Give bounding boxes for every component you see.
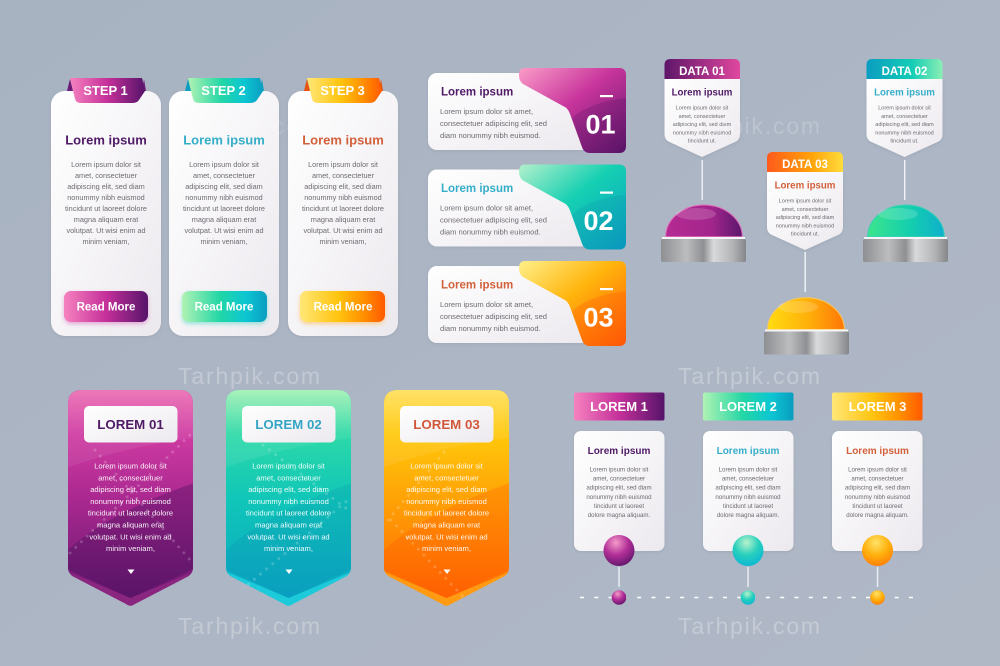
card: step 2: volutpat. Ut wisi enim ad bbox=[184, 226, 264, 235]
shield 03: minim veniam, bbox=[422, 544, 471, 553]
shield 02: magna aliquam erat bbox=[255, 520, 323, 530]
card: 01: Lorem ipsum bbox=[441, 86, 513, 98]
shield 01: amet, consectetuer bbox=[98, 473, 163, 482]
watermarks: Tarhpik.com bbox=[678, 363, 822, 389]
card: 01: consectetuer adipiscing elit, sed bbox=[440, 119, 547, 128]
timeline item 1: Lorem ipsum bbox=[588, 446, 650, 457]
card: 03 bbox=[428, 261, 626, 346]
card: 01: 01 bbox=[585, 110, 616, 140]
card: step 1: Lorem ipsum bbox=[65, 132, 147, 148]
data 01 bbox=[661, 59, 746, 262]
card: step 1: STEP 1 bbox=[83, 83, 128, 98]
timeline item 2: adipiscing elit, sed diam bbox=[715, 485, 781, 492]
data 03: Lorem ipsum bbox=[775, 180, 836, 192]
card: step 1: magna aliquam erat bbox=[74, 215, 138, 224]
shield 03: magna aliquam erat bbox=[413, 520, 481, 530]
data 02: Lorem ipsum dolor sit bbox=[878, 105, 931, 111]
data 03: adipiscing elit, sed diam bbox=[776, 215, 835, 221]
watermarks: Tarhpik.com bbox=[178, 113, 322, 139]
card: step 2: minim veniam, bbox=[200, 237, 248, 246]
card: step 1: Read More bbox=[77, 302, 135, 314]
timeline item 2: dolore magna aliquam. bbox=[717, 512, 780, 519]
card: step 1: adipiscing elit, sed diam bbox=[67, 182, 145, 191]
card: step 3: minim veniam, bbox=[319, 237, 367, 246]
card: step 3: magna aliquam erat bbox=[311, 215, 375, 224]
timeline item 2: amet, consectetuer bbox=[722, 476, 774, 482]
card: step 1: nonummy nibh euismod bbox=[67, 193, 145, 202]
shield 03 bbox=[384, 390, 509, 606]
card: 02: Lorem ipsum bbox=[441, 183, 513, 195]
data 03: DATA 03 bbox=[782, 159, 828, 171]
shield 02: volutpat. Ut wisi enim ad bbox=[247, 532, 330, 541]
data 01: tincidunt ut. bbox=[688, 138, 717, 144]
card: 02: diam nonummy nibh euismod. bbox=[440, 228, 541, 236]
shield 02: minim veniam, bbox=[264, 544, 313, 553]
watermarks: Tarhpik.com bbox=[678, 113, 822, 139]
timeline item 3: LOREM 3 bbox=[849, 399, 906, 414]
shield 03: amet, consectetuer bbox=[414, 473, 479, 482]
panel: shields bbox=[60, 380, 516, 610]
card: step 1: tincidunt ut laoreet dolore bbox=[65, 204, 147, 213]
card: step 2: Lorem ipsum bbox=[183, 132, 265, 148]
shield 01: Lorem ipsum dolor sit bbox=[94, 462, 168, 470]
card: 02: consectetuer adipiscing elit, sed bbox=[440, 216, 547, 224]
data 02 bbox=[863, 59, 948, 262]
shield 02: adipiscing elit, sed diam bbox=[248, 485, 329, 494]
card: step 2: magna aliquam erat bbox=[192, 215, 256, 224]
shield 02: Lorem ipsum dolor sit bbox=[252, 462, 326, 470]
timeline item 1: LOREM 1 bbox=[590, 399, 648, 414]
dashed line bbox=[580, 596, 915, 598]
card: step 2: adipiscing elit, sed diam bbox=[185, 182, 263, 191]
card: 03: Lorem ipsum bbox=[441, 280, 513, 292]
timeline item 3: amet, consectetuer bbox=[851, 476, 904, 482]
timeline item 3: adipiscing elit, sed diam bbox=[845, 485, 910, 492]
panel: step cards bbox=[51, 78, 398, 336]
data 01: DATA 01 bbox=[679, 66, 725, 78]
panel: numbered cards bbox=[428, 68, 626, 346]
timeline item 2: LOREM 2 bbox=[719, 399, 777, 414]
data 03: Lorem ipsum dolor sit bbox=[779, 198, 832, 204]
card: step 2: amet, consectetuer bbox=[193, 171, 256, 180]
card: step 1: amet, consectetuer bbox=[75, 171, 138, 180]
watermarks: Tarhpik.com bbox=[678, 613, 822, 639]
shield 03: nonummy nibh euismod bbox=[406, 497, 487, 506]
data 01: amet, consectetuer bbox=[679, 114, 726, 120]
card: step 2: Read More bbox=[195, 302, 253, 314]
shield 03: Lorem ipsum dolor sit bbox=[410, 462, 484, 470]
card: step 3: nonummy nibh euismod bbox=[304, 193, 382, 202]
card: 01 bbox=[428, 68, 626, 153]
timeline item 3 bbox=[832, 392, 922, 605]
timeline item 2: nonummy nibh euismod bbox=[715, 494, 781, 501]
card: step 3: Lorem ipsum dolor sit bbox=[308, 160, 378, 169]
card: 02: Lorem ipsum dolor sit amet, bbox=[440, 204, 533, 212]
card: 02 bbox=[428, 164, 626, 250]
timeline item 3: nonummy nibh euismod bbox=[845, 494, 911, 501]
shield 01: magna aliquam erat bbox=[97, 520, 165, 530]
timeline item 2 bbox=[703, 392, 794, 605]
data 03: amet, consectetuer bbox=[782, 207, 829, 213]
card: step 2: tincidunt ut laoreet dolore bbox=[183, 204, 265, 213]
panel: data domes bbox=[661, 59, 948, 354]
card: 03: diam nonummy nibh euismod. bbox=[440, 324, 541, 333]
shield 03: adipiscing elit, sed diam bbox=[406, 485, 487, 494]
timeline item 1: adipiscing elit, sed diam bbox=[586, 485, 652, 492]
timeline item 2: Lorem ipsum bbox=[717, 446, 779, 457]
timeline item 1: tincidunt ut laoreet bbox=[594, 503, 644, 510]
data 02: nonummy nibh euismod bbox=[875, 130, 934, 136]
data 03: tincidunt ut. bbox=[791, 232, 820, 238]
panel: timeline bbox=[574, 392, 922, 605]
card: step 3: Read More bbox=[314, 302, 372, 314]
card: step 2 bbox=[169, 78, 279, 336]
card: 01: Lorem ipsum dolor sit amet, bbox=[440, 107, 533, 116]
timeline item 2: Lorem ipsum dolor sit bbox=[719, 466, 778, 473]
timeline item 1 bbox=[574, 392, 664, 605]
data 01: Lorem ipsum bbox=[672, 88, 733, 98]
shield 01: adipiscing elit, sed diam bbox=[90, 485, 171, 494]
card: step 1 bbox=[51, 78, 161, 336]
shield 02: LOREM 02 bbox=[255, 417, 322, 432]
card: step 3: amet, consectetuer bbox=[312, 171, 375, 180]
data 03: nonummy nibh euismod bbox=[776, 223, 834, 229]
shield 01: volutpat. Ut wisi enim ad bbox=[89, 532, 172, 541]
card: step 2: nonummy nibh euismod bbox=[185, 193, 263, 202]
watermarks: Tarhpik.com bbox=[178, 363, 322, 389]
shield 03: tincidunt ut laoreet dolore bbox=[404, 509, 489, 518]
data 03 bbox=[764, 152, 849, 354]
timeline item 3: Lorem ipsum dolor sit bbox=[848, 466, 907, 473]
watermarks bbox=[178, 113, 822, 639]
card: step 1: volutpat. Ut wisi enim ad bbox=[66, 226, 146, 235]
shield 01: tincidunt ut laoreet dolore bbox=[88, 509, 173, 518]
card: 03: Lorem ipsum dolor sit amet, bbox=[440, 300, 533, 309]
data 02: Lorem ipsum bbox=[874, 88, 935, 98]
card: step 3: STEP 3 bbox=[320, 83, 365, 98]
shield 03: LOREM 03 bbox=[413, 417, 480, 432]
shield 01: LOREM 01 bbox=[97, 417, 164, 432]
card: step 3: adipiscing elit, sed diam bbox=[304, 182, 382, 191]
timeline item 3: tincidunt ut laoreet bbox=[852, 503, 903, 510]
shield 01: nonummy nibh euismod bbox=[90, 497, 171, 506]
timeline item 1: Lorem ipsum dolor sit bbox=[590, 466, 649, 473]
data 02: amet, consectetuer bbox=[881, 114, 928, 120]
data 02: adipiscing elit, sed diam bbox=[875, 122, 934, 128]
timeline item 2: tincidunt ut laoreet bbox=[723, 503, 773, 510]
timeline item 1: nonummy nibh euismod bbox=[586, 494, 652, 501]
card: 02: 02 bbox=[583, 206, 614, 236]
timeline item 1: dolore magna aliquam. bbox=[588, 512, 651, 519]
card: step 2: Lorem ipsum dolor sit bbox=[189, 160, 259, 169]
shield 02: tincidunt ut laoreet dolore bbox=[246, 509, 331, 518]
shield 03: volutpat. Ut wisi enim ad bbox=[405, 532, 488, 541]
data 01: adipiscing elit, sed diam bbox=[673, 122, 732, 128]
data 01: nonummy nibh euismod bbox=[673, 130, 731, 136]
shield 01 bbox=[68, 390, 193, 606]
card: step 2: STEP 2 bbox=[201, 83, 246, 98]
shield 02: nonummy nibh euismod bbox=[248, 497, 329, 506]
shield 02: amet, consectetuer bbox=[256, 473, 321, 482]
card: step 3: volutpat. Ut wisi enim ad bbox=[303, 226, 383, 235]
card: 03: consectetuer adipiscing elit, sed bbox=[440, 312, 547, 321]
card: step 3: tincidunt ut laoreet dolore bbox=[302, 204, 384, 213]
shield 02 bbox=[226, 390, 351, 606]
card: step 1: minim veniam, bbox=[82, 237, 130, 246]
shield 01: minim veniam, bbox=[106, 544, 155, 553]
card: step 3: Lorem ipsum bbox=[302, 132, 384, 148]
timeline item 1: amet, consectetuer bbox=[593, 476, 645, 482]
timeline item 3: dolore magna aliquam. bbox=[846, 512, 909, 519]
timeline item 3: Lorem ipsum bbox=[846, 446, 909, 457]
data 02: DATA 02 bbox=[882, 66, 927, 78]
card: 01: diam nonummy nibh euismod. bbox=[440, 131, 541, 140]
card: step 3 bbox=[288, 78, 398, 336]
data 01: Lorem ipsum dolor sit bbox=[676, 105, 729, 111]
data 02: tincidunt ut. bbox=[890, 138, 919, 144]
card: step 1: Lorem ipsum dolor sit bbox=[71, 160, 141, 169]
card: 03: 03 bbox=[583, 302, 614, 332]
watermarks: Tarhpik.com bbox=[178, 613, 322, 639]
